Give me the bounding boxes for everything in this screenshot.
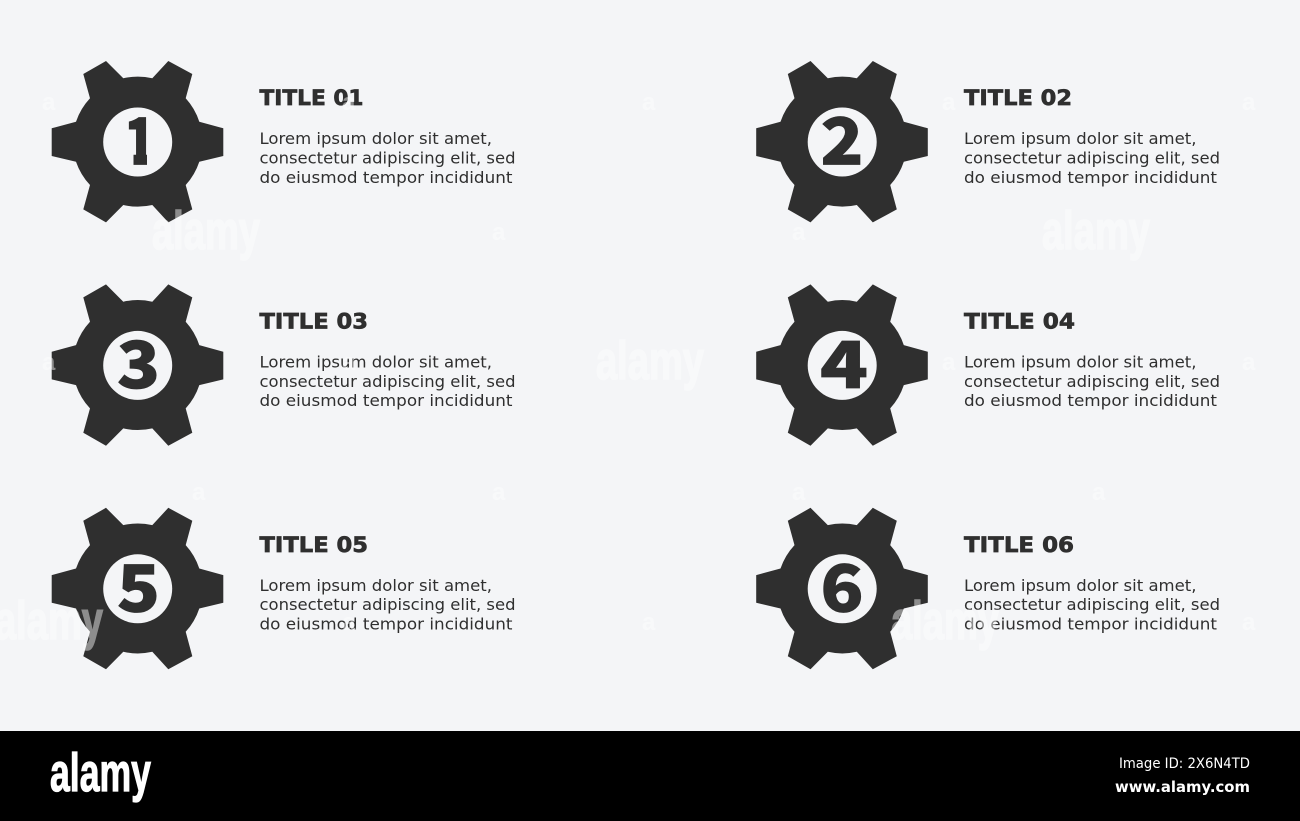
text block 5: consectetur adipiscing elit, sed <box>260 595 516 614</box>
item 2 <box>756 61 1220 222</box>
watermarks: a <box>492 479 506 506</box>
item 5 <box>52 508 515 669</box>
text block 4: consectetur adipiscing elit, sed <box>964 372 1220 391</box>
title 01: TITLE 01 <box>260 86 364 111</box>
icon: gear 1 <box>52 61 223 222</box>
text block 1 <box>260 129 516 187</box>
icon: gear 3 <box>52 284 223 446</box>
text block 3 <box>260 352 516 410</box>
icon: gear 4 <box>756 284 928 446</box>
watermarks: a <box>792 219 806 246</box>
website: www.alamy.com <box>1115 778 1250 796</box>
text block 6: Lorem ipsum dolor sit amet, <box>964 576 1196 595</box>
text block 1: do eiusmod tempor incididunt <box>260 168 512 187</box>
text block 6: do eiusmod tempor incididunt <box>964 615 1217 634</box>
icon: gear 2: 2 <box>820 90 864 184</box>
icon: gear 6 <box>756 508 928 669</box>
watermarks: a <box>642 89 656 116</box>
icon: gear 5: 5 <box>117 536 160 630</box>
text block 2: do eiusmod tempor incididunt <box>964 168 1217 187</box>
watermarks: a <box>342 609 356 636</box>
text block 2 <box>964 129 1220 187</box>
watermarks: a <box>942 349 956 376</box>
watermarks: alamy <box>1042 201 1150 261</box>
text block 2: consectetur adipiscing elit, sed <box>964 148 1220 167</box>
watermarks: a <box>42 349 56 376</box>
icon: gear 1: 1 <box>124 90 156 184</box>
watermarks: a <box>342 89 356 116</box>
text block 1: Lorem ipsum dolor sit amet, <box>260 129 492 148</box>
text block 6 <box>964 576 1220 634</box>
watermarks: a <box>942 89 956 116</box>
icon: gear 5 <box>52 508 223 669</box>
watermarks: a <box>792 479 806 506</box>
icon: gear 3: 3 <box>117 313 160 407</box>
item 3 <box>52 284 515 446</box>
watermarks: a <box>1242 349 1256 376</box>
watermarks: alamy <box>891 591 999 651</box>
text block 5: do eiusmod tempor incididunt <box>260 615 512 634</box>
text block 4 <box>964 352 1220 410</box>
footer bar <box>0 731 1300 821</box>
watermarks: a <box>642 609 656 636</box>
text block 3: do eiusmod tempor incididunt <box>260 391 512 410</box>
watermarks: a <box>192 479 206 506</box>
text block 2: Lorem ipsum dolor sit amet, <box>964 129 1196 148</box>
icon: gear 6: 6 <box>820 536 864 630</box>
watermarks: a <box>1242 609 1256 636</box>
item 6 <box>756 508 1220 669</box>
watermarks: a <box>42 89 56 116</box>
text block 5: Lorem ipsum dolor sit amet, <box>260 576 492 595</box>
text block 1: consectetur adipiscing elit, sed <box>260 148 516 167</box>
title 02: TITLE 02 <box>964 86 1072 111</box>
watermarks: a <box>492 219 506 246</box>
title 05: TITLE 05 <box>260 533 368 558</box>
image id: Image ID: 2X6N4TD <box>1119 756 1250 772</box>
text block 6: consectetur adipiscing elit, sed <box>964 595 1220 614</box>
title 04: TITLE 04 <box>964 309 1075 334</box>
icon: gear 2 <box>756 61 928 222</box>
watermarks: alamy <box>152 201 260 261</box>
text block 3: Lorem ipsum dolor sit amet, <box>260 352 492 371</box>
item 4 <box>756 284 1220 446</box>
icon: gear 4: 4 <box>820 313 868 407</box>
title 03: TITLE 03 <box>260 309 368 334</box>
text block 4: do eiusmod tempor incididunt <box>964 391 1217 410</box>
watermarks <box>0 89 1256 651</box>
text block 3: consectetur adipiscing elit, sed <box>260 372 516 391</box>
text block 5 <box>260 576 516 634</box>
item 1 <box>52 61 515 222</box>
watermarks: a <box>1092 479 1106 506</box>
text block 4: Lorem ipsum dolor sit amet, <box>964 352 1196 371</box>
watermarks: a <box>1242 89 1256 116</box>
title 06: TITLE 06 <box>964 533 1074 558</box>
footer logo: alamy <box>50 743 151 803</box>
watermarks: alamy <box>596 331 704 391</box>
watermarks: a <box>342 349 356 376</box>
